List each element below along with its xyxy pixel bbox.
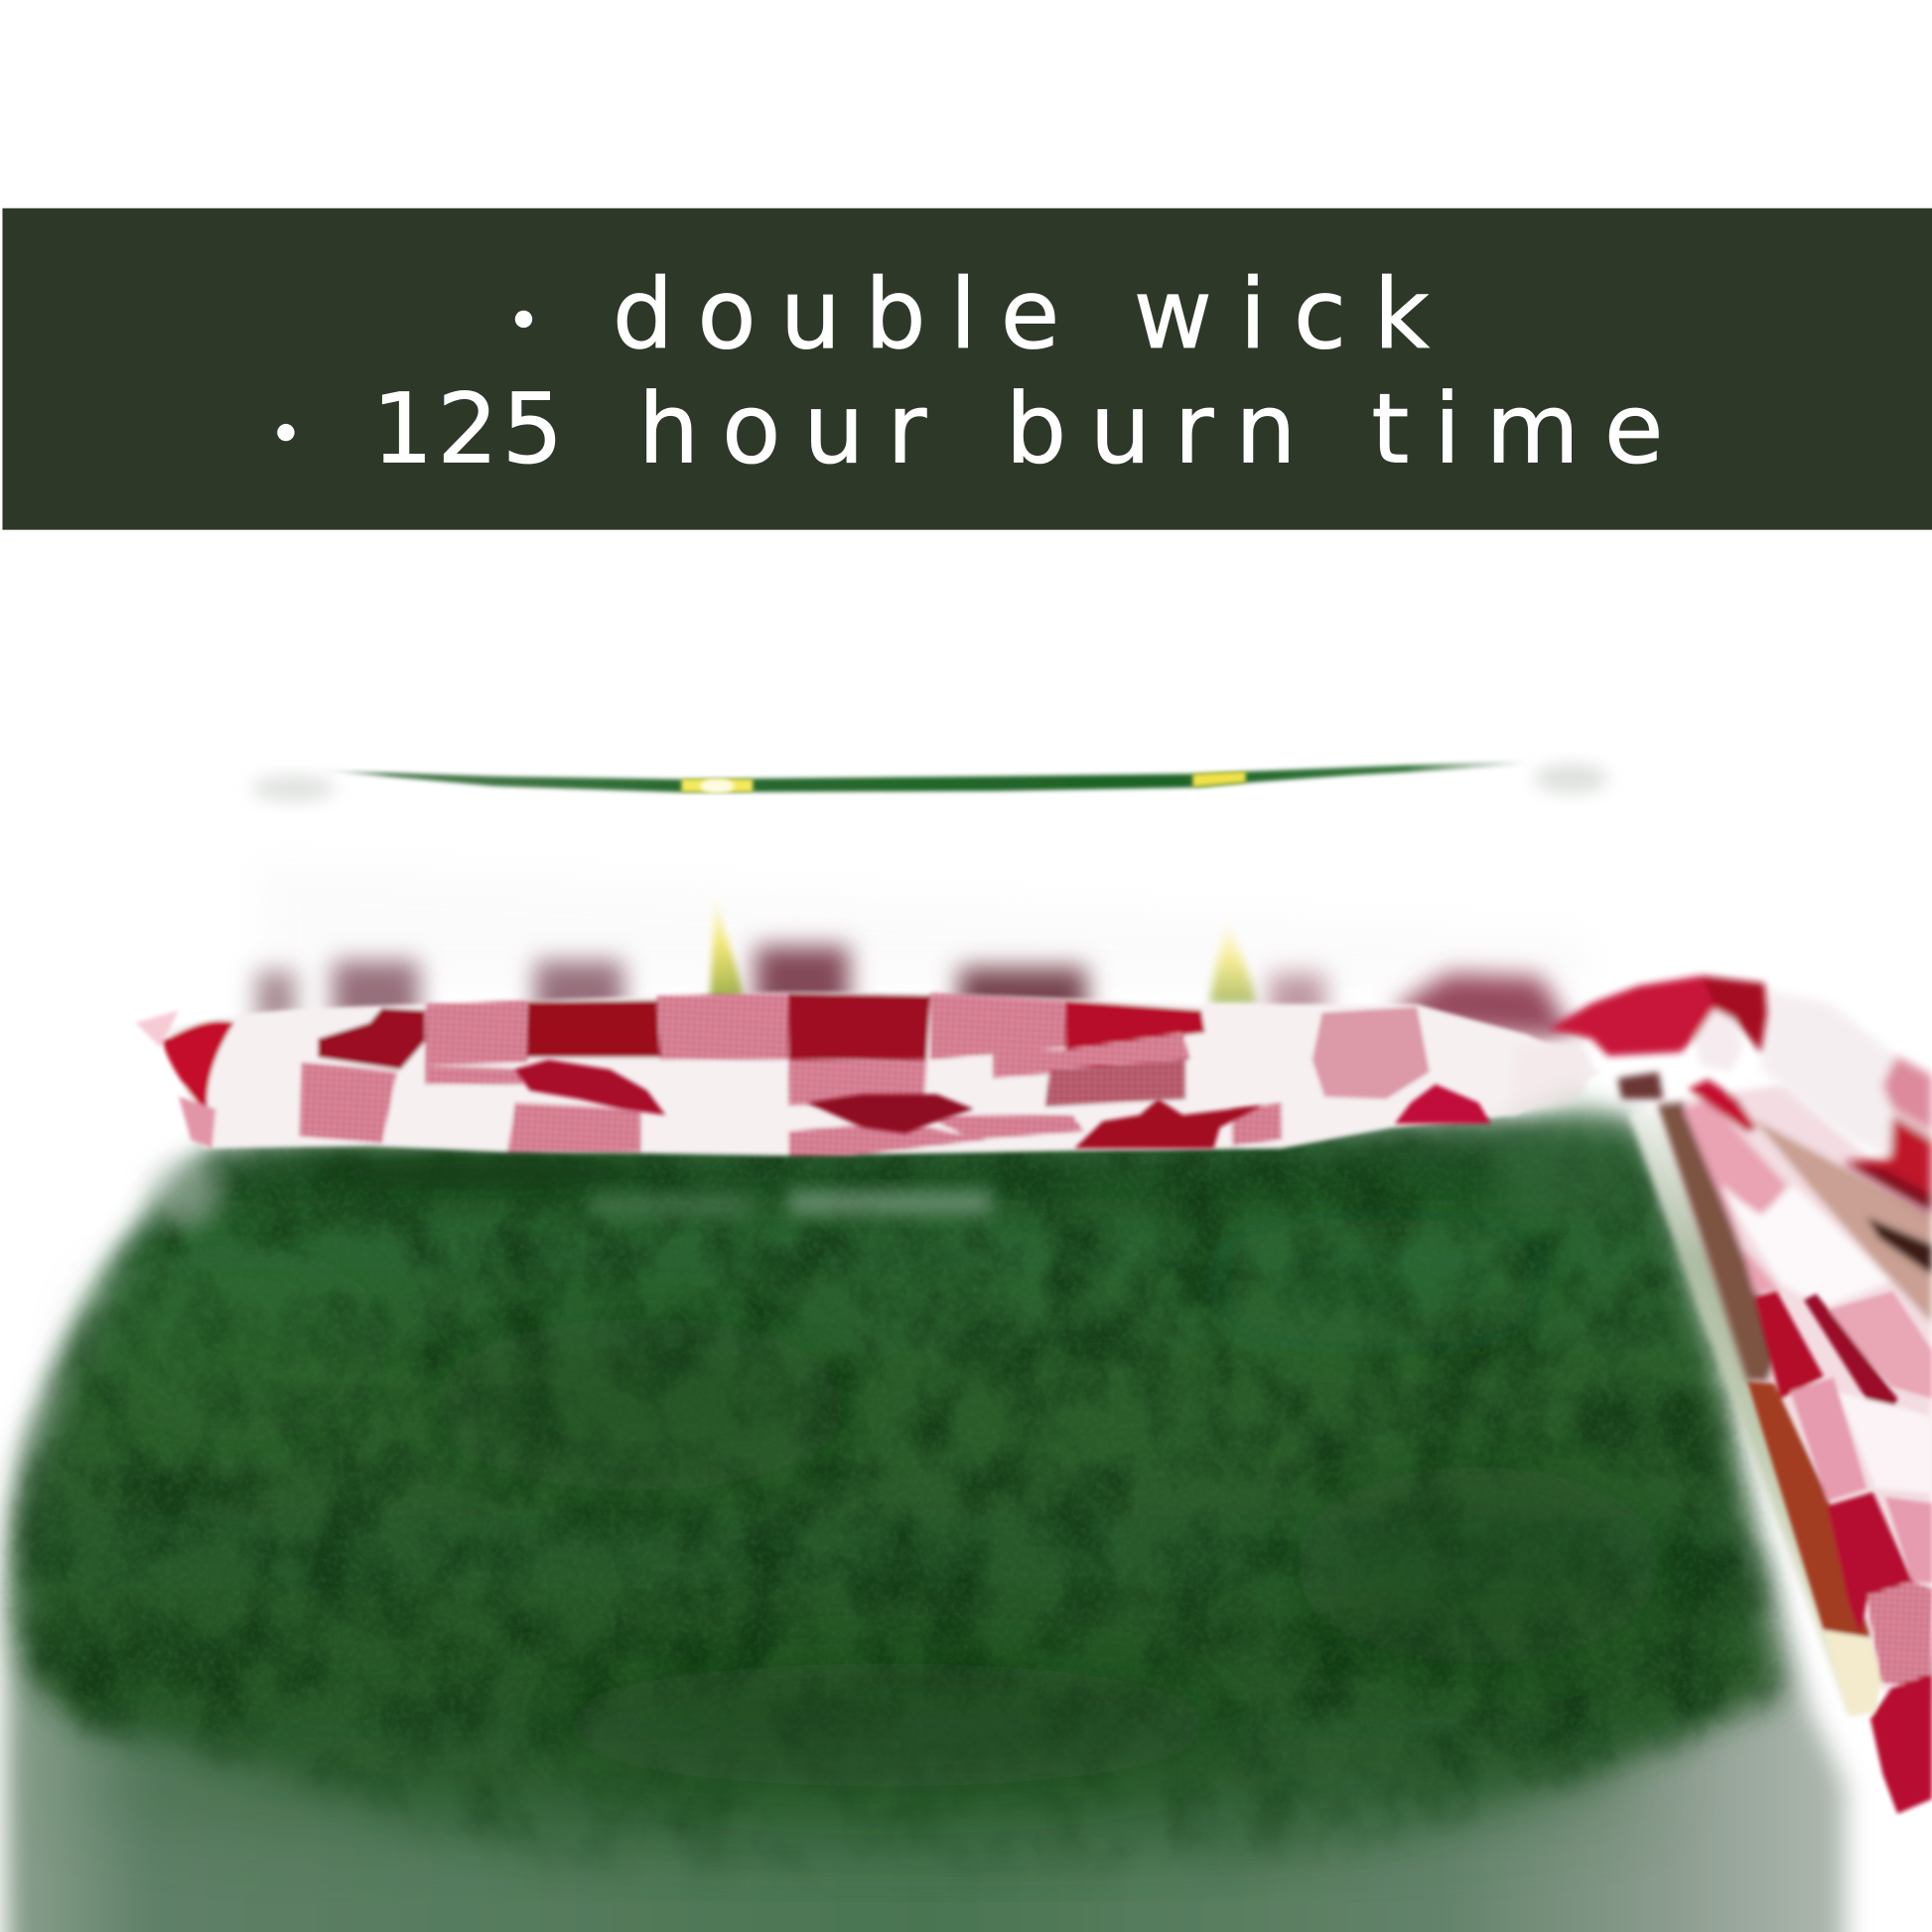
banner text: double wick [515,258,1430,370]
scarf tail to the right [1760,990,1932,1213]
banner text: 125 hour burn time [277,372,1663,484]
banner text: 125 hour burn time: 125 [372,372,563,484]
tail right: red check [1844,1115,1932,1211]
scarf tail lower section [1747,1292,1932,1814]
tail: red stripe [1688,1079,1757,1133]
ghost highlight in jar shoulder [592,1190,992,1217]
wick left [710,885,745,1001]
wax lower fade [73,1725,1651,1836]
blurred scarf seen through glass [256,946,1578,1041]
tail: refracted stripe [1747,1381,1870,1637]
tail: pink middle [1790,1378,1866,1501]
wax light and dark patches [111,1244,1663,1787]
jar side strip [1627,1109,1879,1716]
row 1 right checks [1312,1007,1430,1099]
banner text: double wick: double [613,258,1059,370]
tail: base [1657,1084,1932,1707]
banner text: 125 hour burn time: hour [638,372,926,484]
tail: dark red check upper [1754,1292,1824,1399]
banner [2,208,1932,530]
dark wax band under scarf [321,1156,640,1190]
row 3 lower left checks [300,1062,397,1144]
band base [167,992,1601,1156]
banner text: 125 hour burn time: time [1371,372,1663,484]
pale glass at top left [148,1159,221,1227]
tail: dark red check lower [1828,1492,1912,1636]
tail: white check [1722,1185,1890,1308]
scarf knot [1509,976,1767,1115]
glass haze [259,863,1589,986]
tail: tan shadow [1753,1119,1932,1323]
tail: dark streak [1866,1217,1932,1276]
knot centre [1618,1072,1663,1099]
knot fringe [1509,1042,1591,1115]
fringe blob 1 [515,1059,665,1115]
fringe blob 4 [1395,1084,1491,1124]
row 1 dark red checks [527,1001,660,1057]
tail: pink lower [1866,1581,1932,1691]
row 2 [788,1059,926,1105]
knot white interior [1694,1009,1743,1072]
fringe blob 3 [1074,1099,1263,1149]
green wax [17,1134,1780,1879]
scarf main band [136,992,1601,1156]
tail: pink band [1683,1099,1787,1282]
left frayed end [163,1021,234,1115]
tail: dark stripe [1804,1294,1897,1430]
banner text: 125 hour burn time: burn [1006,372,1297,484]
wick right [1210,915,1257,1004]
tail: frayed end [1870,1673,1932,1814]
jar rim [251,760,1608,802]
scarf tail falling [1657,1079,1932,1707]
tail: cream tip [1824,1630,1881,1716]
fringe blob 2 [807,1094,973,1134]
jar glass body [6,1115,1846,1932]
row 1 pink checks [425,1001,527,1066]
tail right: pink edge [1882,1056,1932,1133]
green under knot [1497,1103,1645,1220]
tail: brown shadow [1657,1102,1780,1382]
tail: white middle [1839,1392,1932,1493]
banner text: double wick: wick [1134,258,1430,370]
